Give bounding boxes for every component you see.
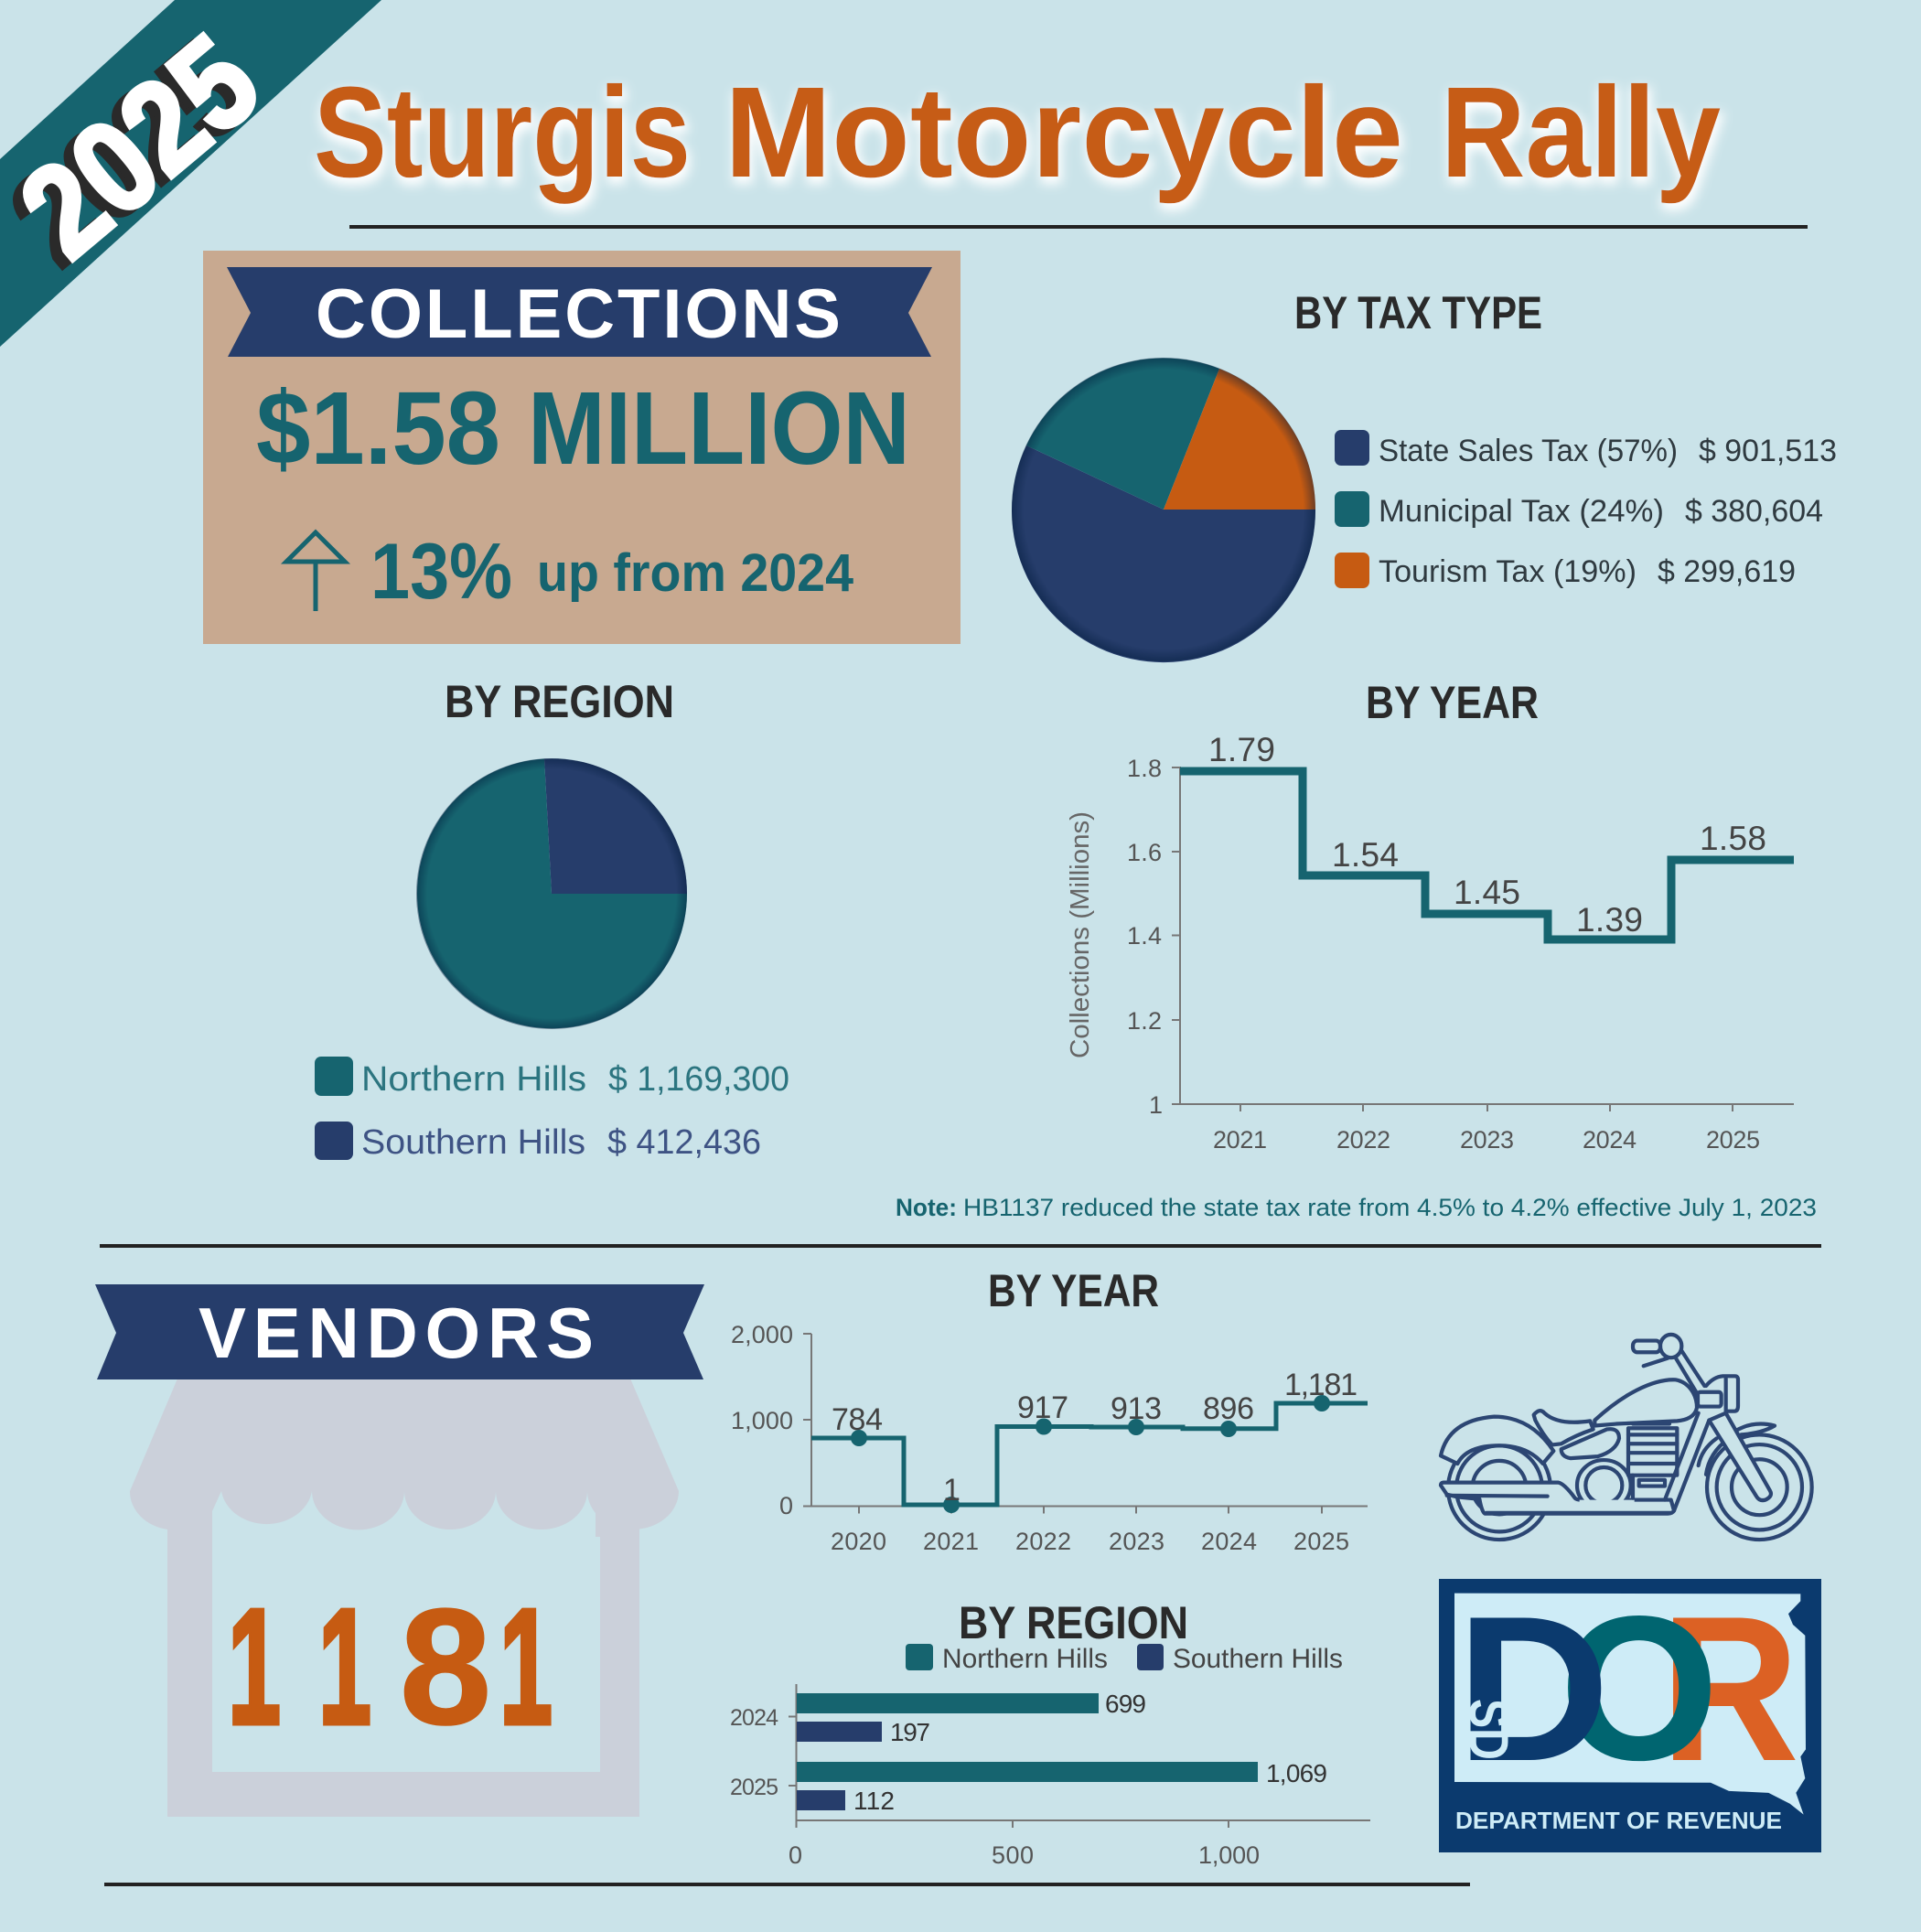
legend: region: Southern Hills	[361, 1123, 585, 1162]
chart: vendors by year: 2,000	[731, 1321, 793, 1348]
chart: vendors by year: 0	[779, 1492, 793, 1519]
comparison text: up from 2024	[537, 543, 853, 603]
chart: collections by year: 1	[1149, 1091, 1163, 1119]
chart: collections by year: 1.8	[1127, 755, 1162, 782]
legend: region: $ 412,436	[607, 1123, 761, 1162]
chart: vendors by region: 1,000	[1198, 1841, 1260, 1869]
chart: vendors by region: 1,069	[1266, 1759, 1327, 1787]
heading: by region: BY REGION	[445, 676, 674, 727]
chart: collections by year: 1.4	[1127, 922, 1162, 950]
chart: collections by year: 1.79	[1208, 731, 1275, 768]
chart: vendors by year: 2020	[831, 1528, 886, 1555]
chart: collections by year: Collections (Millions)	[1066, 811, 1095, 1058]
legend: vendors by region: Southern Hills	[1173, 1644, 1343, 1674]
icon: up arrow	[286, 532, 345, 611]
chart: vendors by region: 699	[1105, 1690, 1146, 1718]
chart: vendors by region: 2024	[730, 1705, 778, 1731]
legend: tax type: Municipal Tax (24%)	[1379, 494, 1664, 529]
chart: vendors by region: 0	[789, 1841, 802, 1869]
chart: vendors by year: 784	[832, 1402, 883, 1437]
title: Motorcycle	[724, 59, 1403, 204]
chart: vendors by year: 913	[1111, 1391, 1162, 1426]
logo: department of revenue: D	[1456, 1572, 1610, 1804]
chart: collections by year: 1.39	[1576, 901, 1643, 939]
note text: HB1137 reduced the state tax rate from 4.5% to 4.2% effective July 1, 2023	[963, 1194, 1817, 1221]
total collections: MILLION	[528, 370, 910, 486]
total collections: $1.58	[256, 370, 500, 486]
legend: tax type: State Sales Tax (57%)	[1379, 434, 1678, 468]
legend: region: Northern Hills	[361, 1060, 586, 1099]
chart: collections by year: 2025	[1706, 1126, 1760, 1154]
logo: department of revenue	[1439, 1572, 1821, 1852]
legend: tax type: Tourism Tax (19%)	[1379, 554, 1637, 589]
chart: vendors by year: 2021	[923, 1528, 979, 1555]
chart: collections by year: 2022	[1336, 1126, 1390, 1154]
note: Note:	[896, 1194, 957, 1221]
chart: vendors by region: 500	[992, 1841, 1034, 1869]
logo: department of revenue: O	[1561, 1575, 1718, 1802]
legend: vendors by region	[906, 1644, 1343, 1674]
chart: collections by year: 1.6	[1127, 839, 1162, 866]
logo: department of revenue: R	[1660, 1572, 1799, 1804]
panel: collections	[203, 251, 960, 644]
vendor count: 1	[499, 1576, 553, 1759]
icon: storefront	[130, 1372, 679, 1817]
state outline	[1454, 1594, 1806, 1815]
pie chart: tax type	[1012, 358, 1315, 662]
vendor count: 1	[228, 1576, 281, 1759]
vendors banner	[95, 1284, 704, 1379]
title	[314, 59, 1721, 204]
chart: vendors by year: 2025	[1293, 1528, 1349, 1555]
chart: vendors by region	[730, 1684, 1370, 1869]
heading: vendors by year: BY YEAR	[988, 1265, 1159, 1316]
logo: department of revenue: SD	[1458, 1699, 1519, 1760]
legend: region	[315, 1057, 789, 1162]
legend: region: $ 1,169,300	[608, 1060, 789, 1099]
chart: vendors by year: 2022	[1015, 1528, 1071, 1555]
chart: vendors by year: 1,181	[1284, 1368, 1358, 1402]
chart: collections by year: 2023	[1460, 1126, 1514, 1154]
total collections	[256, 370, 910, 486]
legend: tax type: $ 299,619	[1658, 554, 1796, 589]
heading: by tax type: BY TAX TYPE	[1294, 287, 1542, 338]
logo: department of revenue: DEPARTMENT OF REVENUE	[1455, 1807, 1782, 1834]
legend: tax type	[1335, 430, 1837, 589]
chart: vendors by year: 1,000	[731, 1407, 793, 1434]
chart: vendors by year	[731, 1321, 1368, 1555]
pie chart: region	[416, 758, 687, 1029]
collections banner: COLLECTIONS	[316, 275, 841, 353]
chart: vendors by region: 112	[853, 1787, 895, 1815]
legend: tax type: $ 901,513	[1699, 434, 1837, 468]
chart: vendors by year: 896	[1203, 1391, 1254, 1426]
chart: vendors by year: 2024	[1201, 1528, 1257, 1555]
chart: vendors by year: 2023	[1109, 1528, 1164, 1555]
chart: collections by year: 1.58	[1700, 820, 1766, 857]
percent increase: 13%	[370, 528, 512, 616]
chart: collections by year: 1.2	[1127, 1007, 1162, 1035]
title: Sturgis	[314, 59, 691, 204]
chart: vendors by region: 2025	[730, 1775, 778, 1800]
year ribbon	[0, 0, 381, 347]
vendor count: 1	[318, 1576, 371, 1759]
collections banner	[227, 267, 932, 357]
title: Rally	[1441, 59, 1721, 204]
chart: collections by year: 2024	[1583, 1126, 1637, 1154]
vendor count	[228, 1575, 553, 1759]
vendor count: 8	[400, 1575, 491, 1759]
chart: vendors by region: 197	[890, 1718, 930, 1746]
chart: collections by year: 2021	[1213, 1126, 1267, 1154]
vendors banner: VENDORS	[199, 1293, 594, 1373]
chart: vendors by year: 1	[943, 1473, 960, 1508]
chart: collections by year: 1.45	[1454, 874, 1520, 911]
heading: collections by year: BY YEAR	[1366, 677, 1539, 728]
icon: motorcycle	[1441, 1335, 1812, 1540]
chart: collections by year	[1066, 731, 1794, 1154]
legend: vendors by region: Northern Hills	[942, 1644, 1108, 1674]
heading: vendors by region: BY REGION	[959, 1597, 1188, 1648]
chart: collections by year: 1.54	[1332, 836, 1399, 874]
chart: vendors by year: 917	[1017, 1390, 1068, 1425]
legend: tax type: $ 380,604	[1685, 494, 1823, 529]
